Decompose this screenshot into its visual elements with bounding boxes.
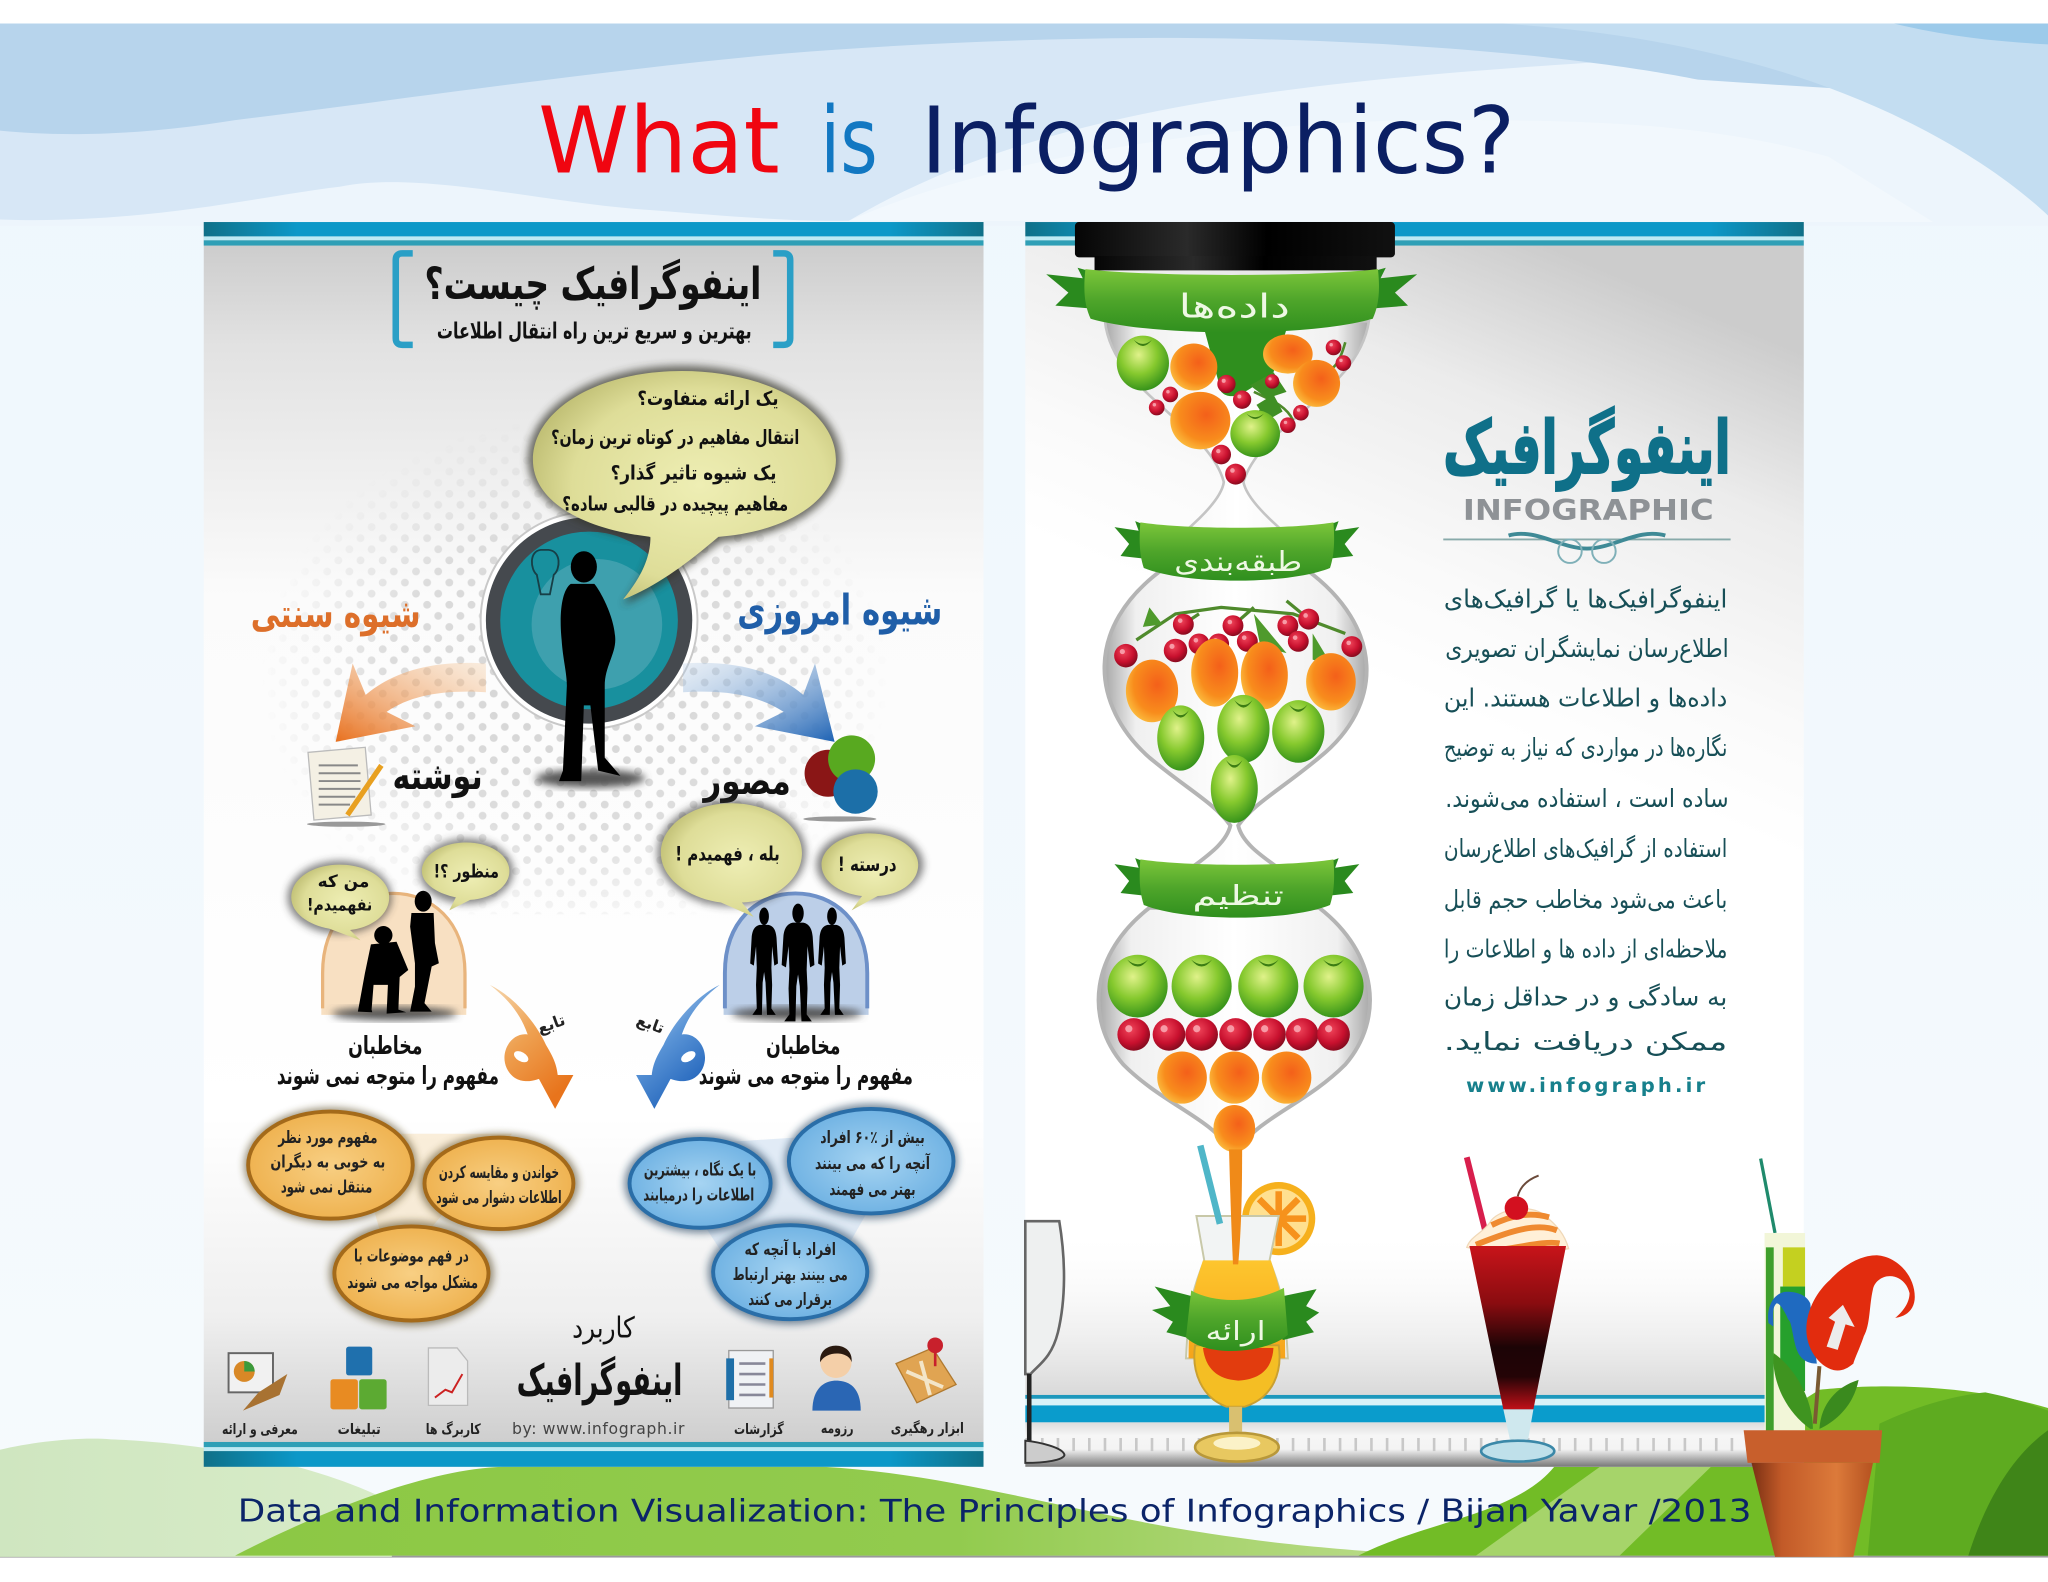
logo plant pot [1744,1255,1915,1557]
ribbon: classification [1114,521,1359,581]
poster heading: اینفوگرافیک چیست؟ [424,258,761,310]
paragraph: داده‌ها و اطلاعات هستند. این [1444,684,1727,713]
title [538,87,1515,194]
icon: notebook [726,1351,773,1408]
icon labels: کاربرگ ها [426,1421,481,1438]
label: visual: مصور [702,759,791,803]
speech bubble: main questions: مفاهیم پیچیده در قالبی ساده؟ [562,493,788,516]
audience: does not understand [287,839,513,1020]
icon: presentation [229,1353,287,1411]
benefit: communicate better: برقرار می کنند [748,1290,832,1310]
arrow: result blue: تابع [634,1010,667,1038]
ribbon: data: داده‌ها [1179,287,1290,325]
paragraph: ساده است ، استفاده می‌شوند. [1445,784,1729,813]
benefit: at a glance: با یک نگاه ، بیشترین [644,1160,756,1181]
logo mark: red flame [1806,1255,1915,1370]
ribbon: classification: طبقه‌بندی [1174,547,1302,578]
consequence: concept not conveyed [244,1108,417,1223]
paragraph [1444,584,1729,1056]
funnel: hourglass [1099,321,1370,1149]
caption: audience left: مخاطبان [348,1031,423,1060]
audience: understands [657,799,923,1021]
paragraph: نگاره‌ها در مواردی که نیاز به توضیح [1444,733,1727,762]
paragraph: اینفوگرافیک‌ها یا گرافیک‌های [1444,584,1727,613]
consequence: difficulty understanding [329,1221,494,1326]
heading: infographic usage: by: www.infograph.ir [512,1419,685,1438]
icon: written paper [307,747,385,827]
icon labels: تبلیغات [338,1422,381,1438]
bubble: I did not understand: من که [318,872,369,892]
benefit: more than 60 percent: بیش از ٪۶۰ افراد [820,1128,925,1148]
logo: infographic latin: INFOGRAPHIC [1463,493,1714,527]
arrow: result orange: تابع [535,1010,568,1038]
logo mark: blue swirl [1768,1292,1817,1364]
juice glass [1186,1145,1315,1462]
heading: infographic usage: کاربرد [572,1310,635,1344]
icon: document chart [428,1348,468,1405]
caption: audience left [277,1031,499,1091]
speech bubble: main questions: یک شیوه تاثیر گذار؟ [611,461,776,484]
panel: data hourglass poster [1025,222,1805,1467]
wine glass [1025,1221,1064,1463]
arrow: result blue [634,985,720,1109]
paragraph: ممکن دریافت نماید. [1444,1027,1727,1056]
title: What [538,87,780,194]
bubble: correct: درسته ! [838,853,897,876]
consequence: difficulty understanding: مشکل مواجه می شوند [347,1273,478,1293]
benefit: communicate better [708,1220,872,1324]
title: is [820,87,878,194]
poster heading [396,253,790,345]
paragraph: اطلاع‌رسان نمایشگران تصویری [1445,634,1729,663]
ribbon: data [1046,268,1417,332]
red drink [1467,1157,1569,1462]
bubble: yes I understood [657,799,806,917]
caption: audience right [699,1031,913,1091]
bubble: I did not understand [287,861,392,940]
pale wedge: left consequences [353,1134,512,1273]
label: written: نوشته [392,754,483,798]
arrow: to written [336,663,486,742]
paragraph: استفاده از گرافیک‌های اطلاع‌رسان [1444,834,1727,863]
consequence: comparing is hard: اطلاعات دشوار می شود [436,1188,562,1208]
speech bubble: main questions: انتقال مفاهیم در کوتاه ترین زمان؟ [551,426,799,449]
panel: what is infographic poster [204,222,984,1467]
fruit: sorted by kind [1114,601,1362,823]
ribbon: presentation [1152,1287,1319,1351]
icon: blocks [330,1347,387,1409]
caption: audience left: مفهوم را متوجه نمی شوند [277,1061,499,1091]
pale wedge: right consequences [653,1130,914,1267]
consequence: comparing is hard: خواندن و مقایسه کردن [439,1163,559,1183]
ribbon: arrangement [1114,858,1359,918]
heading: infographic usage [512,1310,685,1438]
icon labels: معرفی و ارائه [222,1422,298,1438]
poster heading: بهترین و سریع ترین راه انتقال اطلاعات [437,318,752,344]
ornament [1443,534,1731,563]
ribbon: arrangement: تنظیم [1192,881,1284,912]
bubble: meaning?: منظور ؟! [434,862,499,883]
heading: infographic usage: اینفوگرافیک [517,1355,682,1406]
bubble: meaning? [419,839,513,910]
logo mark: arrow [1827,1305,1855,1350]
bubble: yes I understood: بله ، فهمیدم ! [675,843,780,866]
logo: infographic persian: اینفوگرافیک [1443,406,1731,491]
website url: www.infograph.ir [1466,1074,1705,1097]
bubble: I did not understand: نفهمیدم! [307,895,372,915]
consequence: comparing is hard [419,1134,579,1233]
paragraph: ملاحظه‌ای از داده ها و اطلاعات را [1444,934,1727,963]
benefit: more than 60 percent: آنچه را که می بینند [815,1152,931,1174]
bottle cap [1075,222,1395,270]
ribbon: presentation: ارائه [1206,1317,1266,1347]
caption: audience right: مفهوم را متوجه می شوند [699,1061,913,1091]
label: modern way: شیوه امروزی [737,585,942,635]
benefit: at a glance: اطلاعات را درمیابند [643,1185,754,1205]
footer credit: Data and Information Visualization: The Principles of Infographics / Bijan Yavar /2013 [238,1494,1752,1530]
paragraph: باعث می‌شود مخاطب حجم قابل [1444,885,1727,914]
icon: map pin [896,1337,956,1403]
fruit: unsorted data [1117,329,1351,485]
benefit: more than 60 percent [785,1104,957,1219]
benefit: communicate better: می بینند بهتر ارتباط [733,1265,848,1285]
consequence: concept not conveyed: مفهوم مورد نظر [278,1128,377,1148]
green hills [0,1386,2048,1557]
consequence: difficulty understanding: در فهم موضوعات با [354,1247,469,1267]
fruit: arranged rows [1108,955,1364,1152]
title: Infographics? [921,87,1515,194]
label: traditional way: شیوه سنتی [251,592,421,637]
benefit: communicate better: افراد با آنچه که [744,1238,836,1260]
paragraph: به سادگی و در حداقل زمان [1444,983,1727,1012]
bubble: correct [816,829,923,910]
benefit: more than 60 percent: بهتر می فهمند [829,1180,916,1200]
arrow: result orange [490,985,573,1109]
icon labels [222,1419,964,1438]
speech bubble: main questions [528,366,841,605]
icon: person [812,1346,861,1411]
central target circle [481,512,697,729]
benefit: at a glance [624,1134,776,1233]
silhouette: presenter [536,551,645,788]
arrow: to visual [683,663,835,742]
icon labels: گزارشات [734,1420,784,1438]
caption: audience right: مخاطبان [766,1031,840,1060]
icon labels: ابزار رهگیری [891,1419,964,1437]
icon labels: رزومه [821,1421,854,1437]
consequence: concept not conveyed: منتقل نمی شود [281,1178,372,1198]
speech bubble: main questions: یک ارائه متفاوت؟ [637,387,778,410]
consequence: concept not conveyed: به خوبی به دیگران [270,1152,385,1173]
green drink [1761,1159,1805,1435]
icon: colour circles [803,735,878,822]
